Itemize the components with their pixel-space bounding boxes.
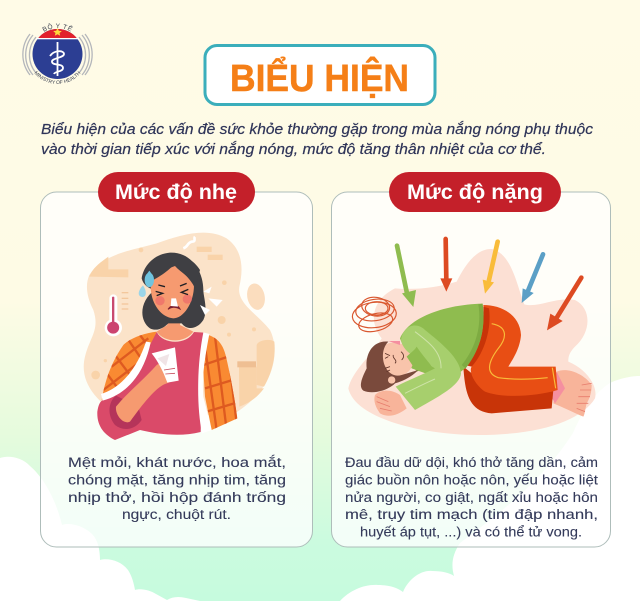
symptoms text: mild: ngực, chuột rút. — [122, 507, 231, 522]
woman head and hair — [139, 237, 223, 330]
symptoms text: severe: mê, trụy tim mạch (tim đập nhanh, — [345, 507, 598, 522]
heading pill: severe — [389, 172, 561, 212]
symptoms text: severe: huyết áp tụt, ...) và có thể tử vong. — [360, 524, 582, 540]
illustration: overheated woman — [84, 233, 275, 440]
person — [361, 304, 592, 417]
symptoms text: mild: nhịp thở, hồi hộp đánh trống — [68, 490, 286, 505]
symptoms text: mild: chóng mặt, tăng nhịp tim, tăng — [68, 472, 286, 488]
panel: mild symptoms — [40, 172, 312, 547]
logo: Bộ Y tế: MINISTRY OF HEALTH — [34, 71, 80, 84]
symptoms text: severe: nửa người, co giật, ngất xỉu hoặc hôn — [345, 490, 598, 505]
logo: Bộ Y tế: BỘ Y TẾ — [42, 23, 73, 32]
heading pill: severe: Mức độ nặng — [407, 181, 543, 204]
symptoms text: severe — [345, 455, 598, 540]
illustration: collapsed man — [348, 239, 596, 435]
intro text — [41, 121, 594, 158]
symptoms text: mild: Mệt mỏi, khát nước, hoa mắt, — [68, 455, 286, 470]
heading pill: mild — [98, 172, 255, 212]
logo: Bộ Y tế — [22, 23, 93, 84]
symptoms text: severe: giác buồn nôn hoặc nôn, yếu hoặc liệt — [345, 472, 598, 488]
icon: dizzy scribble — [351, 295, 398, 335]
icon: heat arrows — [397, 239, 581, 330]
woman body — [97, 313, 237, 440]
icon: thermometer — [105, 292, 128, 336]
intro text: vào thời gian tiếp xúc với nắng nóng, mức độ tăng thân nhiệt của cơ thể. — [41, 141, 546, 158]
symptoms text: mild — [68, 455, 286, 522]
panel: severe symptoms — [332, 172, 610, 547]
heading pill: mild: Mức độ nhẹ — [115, 181, 237, 204]
title box: BIỂU HIỆN — [230, 55, 409, 100]
symptoms text: severe: Đau đầu dữ dội, khó thở tăng dần, cảm — [345, 455, 598, 470]
title box — [205, 46, 435, 104]
intro text: Biểu hiện của các vấn đề sức khỏe thường gặp trong mùa nắng nóng phụ thuộc — [41, 121, 594, 138]
